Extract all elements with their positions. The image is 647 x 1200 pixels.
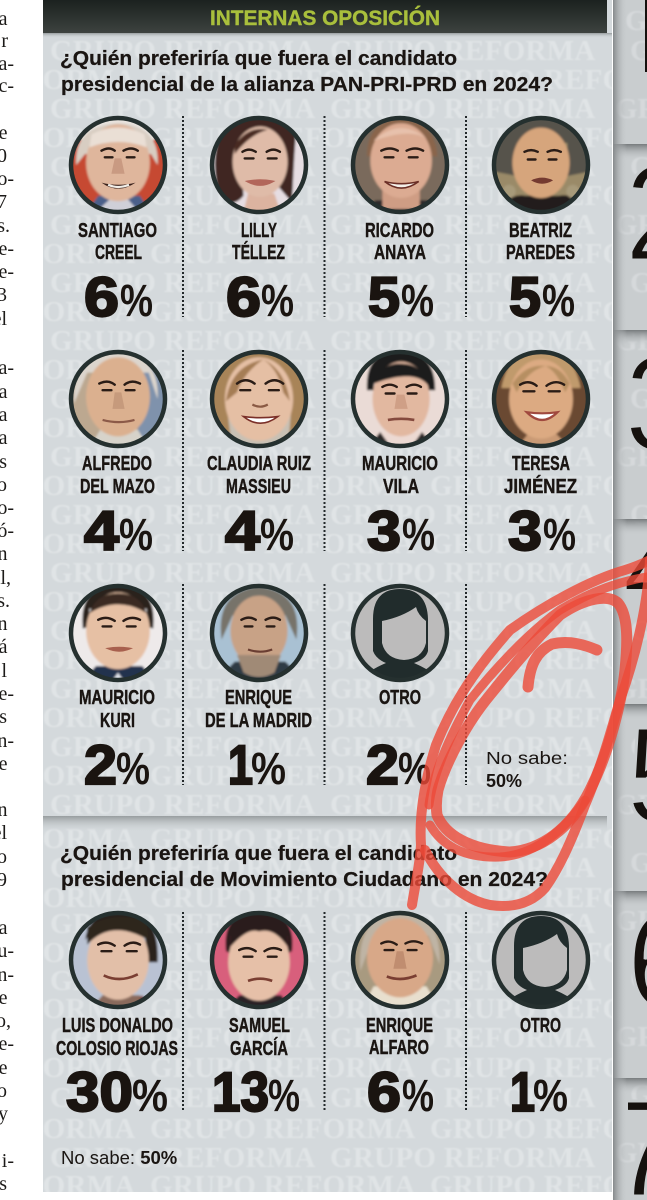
watermark: GRUPO REFORMA: GRUPO REFORMA — [150, 993, 416, 1025]
percentage: % — [402, 509, 435, 560]
percentage: % — [119, 509, 153, 560]
percentage: % — [542, 275, 575, 326]
percentage — [367, 1060, 434, 1123]
watermark: GRUPO REFORMA: GRUPO REFORMA — [330, 615, 596, 647]
watermark: GRUPO REFORMA: GRUPO REFORMA — [150, 937, 416, 969]
percentage: 1 — [510, 1060, 535, 1123]
candidate: Otro (MC) — [491, 910, 591, 1123]
percentage: 2 — [366, 733, 399, 796]
candidate: Santiago Creel — [68, 116, 168, 318]
percentage — [508, 499, 576, 562]
watermark: GRUPO REFORMA: GRUPO REFORMA — [330, 1082, 596, 1114]
watermark: GRUPO REFORMA: GRUPO REFORMA — [150, 586, 416, 618]
question heading: PAN-PRI-PRD: ¿Quién preferiría que fuera el candidato — [60, 47, 457, 70]
neighbouring article text fragments — [0, 8, 14, 1195]
watermark: GRUPO REFORMA: GRUPO REFORMA — [150, 882, 416, 914]
name: ENRIQUE — [225, 686, 292, 709]
watermark: GRUPO REFORMA: GRUPO REFORMA — [330, 93, 596, 125]
candidate: Teresa Jiménez — [492, 350, 590, 552]
percentage: % — [116, 743, 150, 794]
name: ANAYA — [374, 241, 426, 264]
percentage: 2 — [84, 733, 117, 796]
name: OTRO — [520, 1014, 561, 1037]
name: ENRIQUE — [366, 1014, 433, 1037]
watermark: GRUPO REFORMA: GRUPO REFORMA — [50, 35, 316, 67]
candidate: Enrique Alfaro — [350, 910, 450, 1113]
name: ALFREDO — [82, 452, 152, 475]
watermark: GRUPO REFORMA: GRUPO REFORMA — [330, 325, 596, 357]
watermark: GRUPO REFORMA: GRUPO REFORMA — [50, 209, 316, 241]
watermark: GRUPO REFORMA: GRUPO REFORMA — [50, 267, 316, 299]
watermark: GRUPO REFORMA: GRUPO REFORMA — [150, 528, 416, 560]
percentage: 4 — [225, 499, 260, 562]
percentage: % — [132, 1070, 168, 1121]
name: JIMÉNEZ — [504, 475, 577, 498]
name — [207, 452, 311, 498]
dotted column dividers — [183, 116, 466, 1111]
watermark: GRUPO REFORMA: GRUPO REFORMA — [50, 852, 316, 884]
watermark: GRUPO REFORMA: GRUPO REFORMA — [330, 965, 596, 997]
watermark: GRUPO REFORMA: GRUPO REFORMA — [150, 1113, 416, 1145]
question heading: Movimiento Ciudadano: ¿Quién preferiría que fuera el candidato — [60, 842, 457, 865]
watermark: GRUPO REFORMA: GRUPO REFORMA — [50, 615, 316, 647]
percentage: % — [398, 743, 431, 794]
candidate: Lilly Téllez — [210, 116, 308, 318]
watermark: GRUPO REFORMA: GRUPO REFORMA — [330, 673, 596, 705]
watermark: GRUPO REFORMA: GRUPO REFORMA — [330, 35, 596, 67]
watermark: GRUPO REFORMA: GRUPO REFORMA — [50, 1082, 316, 1114]
watermark: GRUPO REFORMA: GRUPO REFORMA — [330, 557, 596, 589]
percentage: % — [260, 509, 294, 560]
watermark: GRUPO REFORMA: GRUPO REFORMA — [150, 1052, 416, 1084]
candidate: Alfredo del Mazo — [68, 350, 168, 551]
watermark: GRUPO REFORMA: GRUPO REFORMA — [50, 325, 316, 357]
watermark: GRUPO REFORMA: GRUPO REFORMA — [150, 702, 416, 734]
watermark: GRUPO REFORMA: GRUPO REFORMA — [330, 151, 596, 183]
name: DE LA MADRID — [205, 709, 312, 732]
candidate: Samuel García — [210, 910, 308, 1113]
header bar: Internas oposición: INTERNAS OPOSICIÓN — [210, 6, 440, 30]
percentage — [228, 733, 286, 796]
watermark: GRUPO REFORMA: GRUPO REFORMA — [150, 644, 416, 676]
percentage — [368, 265, 434, 328]
percentage: % — [120, 275, 153, 326]
candidate: Claudia Ruiz Massieu — [207, 350, 311, 551]
name: CREEL — [95, 241, 142, 264]
watermark: GRUPO REFORMA: GRUPO REFORMA — [150, 238, 416, 270]
name: TERESA — [512, 452, 570, 475]
percentage: % — [402, 1070, 434, 1121]
watermark: GRUPO REFORMA: GRUPO REFORMA — [330, 852, 596, 884]
name — [232, 219, 285, 264]
percentage: % — [251, 743, 286, 794]
watermark: GRUPO REFORMA: GRUPO REFORMA — [50, 441, 316, 473]
candidate: Mauricio Vila — [350, 350, 450, 552]
percentage — [84, 733, 150, 796]
watermark: GRUPO REFORMA: GRUPO REFORMA — [50, 1022, 316, 1054]
question heading: PAN-PRI-PRD: presidencial de la alianza PAN-PRI-PRD en 2024? — [61, 73, 553, 96]
watermark: GRUPO REFORMA: GRUPO REFORMA — [150, 412, 416, 444]
watermark: GRUPO REFORMA: GRUPO REFORMA — [50, 383, 316, 415]
percentage — [226, 265, 294, 328]
percentage — [366, 733, 431, 796]
neighbouring article text fragments: l — [1, 660, 7, 682]
watermark: GRUPO REFORMA: GRUPO REFORMA — [150, 180, 416, 212]
percentage: 6 — [226, 265, 261, 328]
candidate: Ricardo Anaya — [350, 116, 450, 318]
name — [506, 219, 575, 264]
percentage — [509, 265, 575, 328]
watermark: GRUPO REFORMA: GRUPO REFORMA — [330, 499, 596, 531]
watermark: GRUPO REFORMA: GRUPO REFORMA — [50, 557, 316, 589]
header bar: Internas oposición — [43, 0, 612, 38]
question heading: Movimiento Ciudadano: presidencial de Movimiento Ciudadano en 2024? — [61, 868, 548, 891]
percentage — [225, 499, 294, 562]
percentage: % — [543, 509, 576, 560]
name: MASSIEU — [226, 475, 291, 498]
name: MAURICIO — [362, 452, 438, 475]
percentage: 3 — [367, 499, 401, 562]
watermark: GRUPO REFORMA: GRUPO REFORMA — [50, 93, 316, 125]
percentage: 30 — [66, 1060, 133, 1123]
watermark: GRUPO REFORMA: GRUPO REFORMA — [330, 731, 596, 763]
name — [78, 219, 157, 264]
watermark: GRUPO REFORMA: GRUPO REFORMA — [150, 354, 416, 386]
neighbouring article text fragments: i- — [2, 1150, 14, 1172]
name: LILLY — [241, 219, 277, 242]
percentage — [84, 499, 153, 562]
name — [365, 219, 434, 264]
watermark: GRUPO REFORMA: GRUPO REFORMA — [50, 1142, 316, 1174]
watermark: GRUPO REFORMA: GRUPO REFORMA — [330, 383, 596, 415]
name: COLOSIO RIOJAS — [56, 1037, 178, 1060]
name: RICARDO — [365, 219, 434, 242]
percentage: 4 — [84, 499, 119, 562]
name — [362, 452, 438, 498]
watermark: GRUPO REFORMA: GRUPO REFORMA — [150, 823, 416, 855]
percentage: 6 — [367, 1060, 401, 1123]
watermark: GRUPO REFORMA: GRUPO REFORMA — [50, 731, 316, 763]
watermark: GRUPO REFORMA: GRUPO REFORMA — [50, 789, 316, 821]
section divider shadow — [43, 816, 607, 832]
percentage: 1 — [228, 733, 253, 796]
question heading: Movimiento Ciudadano — [60, 842, 548, 891]
name: KURI — [100, 709, 135, 732]
name: OTRO — [379, 686, 421, 709]
hand-drawn red circle annotation — [412, 555, 647, 906]
name — [229, 1014, 290, 1060]
watermark: GRUPO REFORMA: GRUPO REFORMA — [330, 789, 596, 821]
name: PAREDES — [506, 241, 575, 264]
name: BEATRIZ — [509, 219, 572, 242]
name: GARCÍA — [230, 1037, 288, 1060]
watermark: GRUPO REFORMA: GRUPO REFORMA — [330, 1142, 596, 1174]
name: DEL MAZO — [80, 475, 155, 498]
percentage: 6 — [84, 265, 119, 328]
candidate: Beatriz Paredes — [492, 116, 590, 318]
watermark: GRUPO REFORMA: GRUPO REFORMA — [50, 965, 316, 997]
name — [205, 686, 312, 732]
question heading: PAN-PRI-PRD — [60, 47, 553, 96]
no sabe note (MC): No sabe: 50% — [61, 1147, 177, 1168]
name: SAMUEL — [229, 1014, 290, 1037]
watermark: GRUPO REFORMA: GRUPO REFORMA — [50, 673, 316, 705]
name — [79, 686, 155, 732]
watermark: GRUPO REFORMA: GRUPO REFORMA — [150, 470, 416, 502]
watermark: GRUPO REFORMA: GRUPO REFORMA — [330, 908, 596, 940]
percentage: % — [533, 1070, 568, 1121]
watermark: GRUPO REFORMA: GRUPO REFORMA — [150, 122, 416, 154]
name: SANTIAGO — [78, 219, 157, 242]
watermark: GRUPO REFORMA: GRUPO REFORMA — [330, 441, 596, 473]
percentage: 13 — [212, 1060, 269, 1123]
percentage: 5 — [368, 265, 400, 328]
percentage: % — [401, 275, 434, 326]
watermark: GRUPO REFORMA: GRUPO REFORMA — [50, 499, 316, 531]
percentage — [84, 265, 153, 328]
no sabe note: 50% — [486, 771, 522, 791]
candidate: Enrique de la Madrid — [206, 584, 312, 786]
name: ALFARO — [369, 1036, 429, 1059]
percentage: % — [268, 1070, 300, 1121]
watermark: GRUPO REFORMA: GRUPO REFORMA — [150, 64, 416, 96]
percentage: 3 — [508, 499, 542, 562]
name: MAURICIO — [79, 686, 155, 709]
percentage — [66, 1060, 168, 1123]
name: VILA — [383, 475, 419, 498]
candidate: Mauricio Kuri — [68, 584, 168, 786]
name — [80, 452, 155, 498]
name — [504, 452, 577, 498]
right neighbouring column with clipped numerals — [613, 0, 647, 1200]
percentage — [367, 499, 435, 562]
watermark: GRUPO REFORMA: GRUPO REFORMA — [330, 209, 596, 241]
candidate: Luis Donaldo Colosio Riojas — [56, 905, 178, 1123]
candidate: Otro — [350, 583, 450, 796]
name — [56, 1014, 178, 1060]
watermark: GRUPO REFORMA: GRUPO REFORMA — [150, 296, 416, 328]
watermark: GRUPO REFORMA: GRUPO REFORMA — [150, 760, 416, 792]
percentage: % — [261, 275, 294, 326]
percentage: 5 — [509, 265, 541, 328]
watermark: GRUPO REFORMA: GRUPO REFORMA — [50, 908, 316, 940]
name: TÉLLEZ — [232, 241, 285, 264]
no sabe note — [486, 748, 568, 791]
no sabe note: No sabe: — [486, 748, 568, 768]
name — [366, 1014, 433, 1059]
watermark: GRUPO REFORMA: GRUPO REFORMA — [330, 1022, 596, 1054]
percentage — [510, 1060, 568, 1123]
watermark: GRUPO REFORMA: GRUPO REFORMA — [330, 267, 596, 299]
watermark: GRUPO REFORMA: GRUPO REFORMA — [50, 151, 316, 183]
neighbouring article text fragments: r — [1, 30, 8, 52]
name: CLAUDIA RUIZ — [207, 452, 311, 475]
name: LUIS DONALDO — [62, 1014, 173, 1037]
